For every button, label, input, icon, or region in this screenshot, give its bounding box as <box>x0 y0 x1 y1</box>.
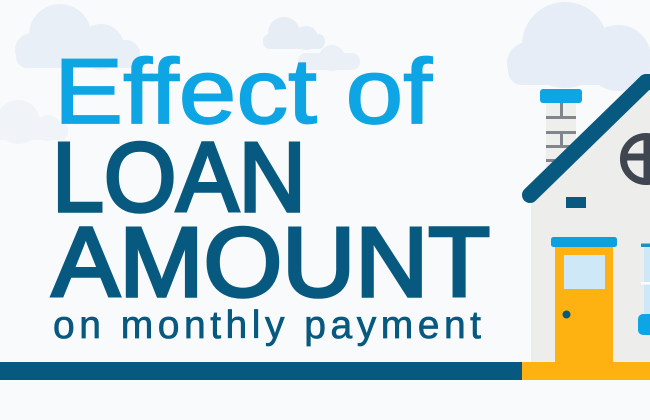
round attic window <box>622 136 650 182</box>
title: AMOUNT: AMOUNT <box>52 207 490 317</box>
roof <box>530 82 650 195</box>
cloud: centre right <box>298 45 360 71</box>
icon: house <box>530 82 650 363</box>
cloud: top left <box>15 4 140 70</box>
icon: chimney <box>540 89 582 175</box>
subtitle: on monthly payment: on monthly payment <box>53 304 481 347</box>
cloud: mid left <box>0 100 68 144</box>
side window <box>638 244 650 335</box>
cloud: top right <box>507 2 650 91</box>
cloud: top centre <box>263 17 325 50</box>
ground bar: orange <box>522 362 650 380</box>
door <box>551 237 617 363</box>
small vent <box>566 197 586 208</box>
ground bar: blue <box>0 362 522 380</box>
house wall <box>531 84 650 362</box>
title: LOAN: LOAN <box>52 122 306 232</box>
title: Effect of: Effect of <box>54 41 432 143</box>
